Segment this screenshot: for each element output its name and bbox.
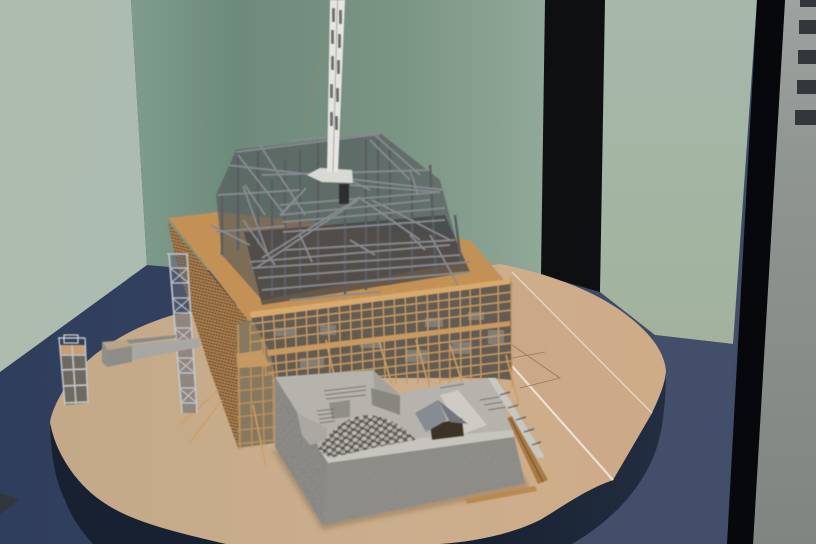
thick front planks [250,279,510,318]
guy wire [303,30,328,135]
wood deck [168,212,510,322]
small watch tower [58,335,88,405]
loose planks on ground [465,486,537,504]
scaffold front face [180,276,519,467]
stone left face [275,377,327,525]
frame verticals [222,140,462,300]
stone top floor [275,370,513,462]
rubble mound [318,415,416,458]
crane footing [307,168,353,183]
steel frame structure [210,133,470,305]
dark base side [50,370,666,544]
crane mast with banner [303,0,345,172]
banner markings [330,8,342,130]
small gate hut [415,400,468,440]
black window frame [727,0,785,544]
diagonal braces [180,340,519,467]
frame core upper [216,133,462,300]
far right grey panel [753,0,816,544]
left wall [0,0,147,372]
leaning wooden planks [507,416,548,484]
frame beams [210,133,470,300]
label card [0,493,19,515]
beige top [50,264,666,544]
green back wall [131,0,546,300]
black column [541,0,607,292]
white groove lines [512,272,652,413]
wall top rim [318,430,514,463]
inner steps and blocks [297,370,512,445]
stone front face [323,432,525,525]
guy line rectangle [512,345,560,388]
ground shadow [272,450,530,530]
frame core lower [244,215,470,305]
scaffolded building [168,212,519,467]
right ramp section [512,272,652,480]
right green wall panel [600,0,757,344]
long side staircase [488,378,545,458]
stone castle base [272,370,548,530]
front-left scaffold block [236,318,275,449]
vent slots [795,0,816,125]
scaffold left face [168,222,250,448]
right blue table strip [560,335,733,544]
blue table surface [0,250,816,544]
round model base [50,264,666,544]
low stone foundation block [102,335,200,367]
tall lattice tower [167,254,197,413]
